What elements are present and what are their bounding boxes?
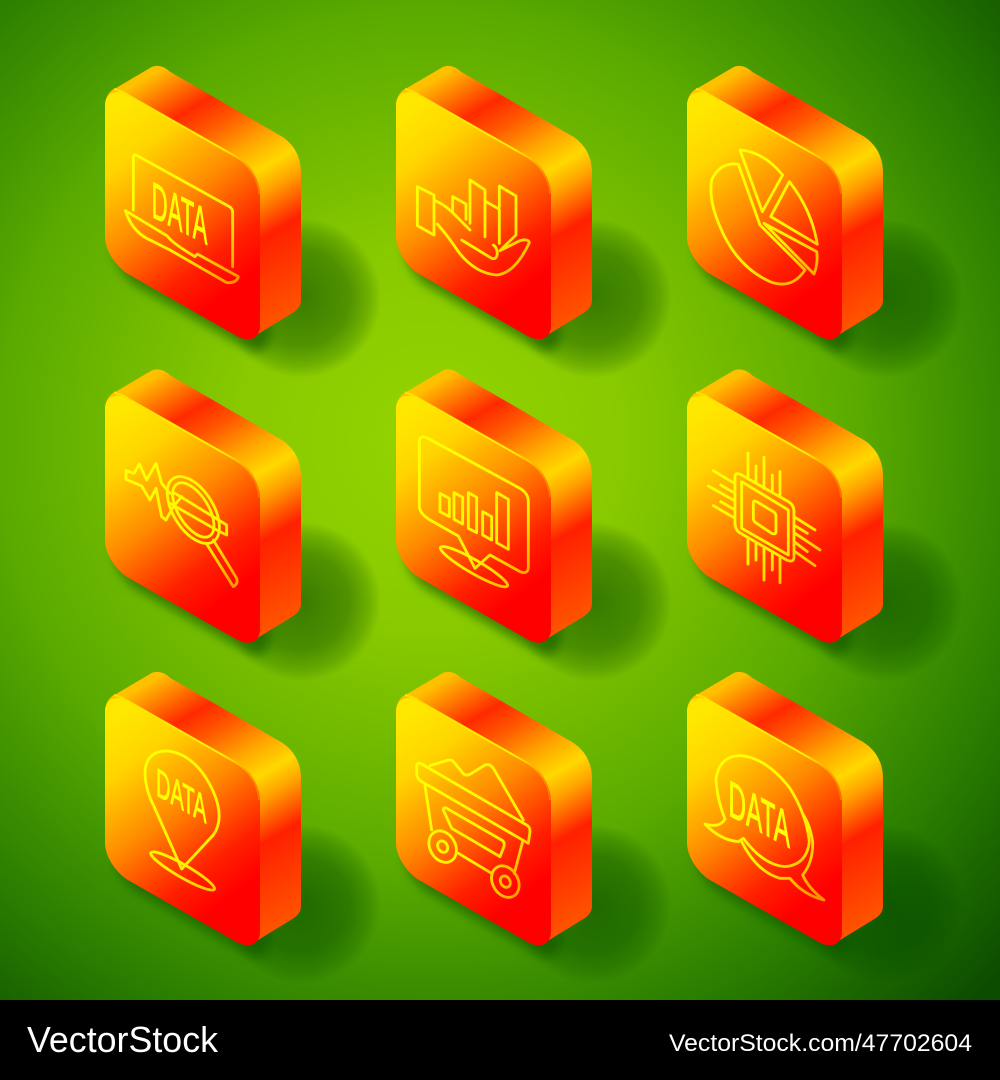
tile: chat bars (396, 369, 672, 682)
tile: mine cart (396, 672, 672, 984)
brand name: VectorStock (27, 1019, 219, 1060)
tile block (105, 369, 381, 682)
tile block (396, 66, 672, 378)
tile: hand with bars (396, 66, 672, 378)
tile: location pin (105, 672, 381, 984)
tile: pie chart (687, 66, 963, 378)
icon: magnifier over waveform (126, 463, 237, 587)
tile: speech bubbles (687, 672, 963, 984)
tile block (687, 66, 963, 378)
icon: data speech bubbles: DATA (728, 769, 790, 860)
icon: bubble with bar chart (419, 437, 528, 592)
tile block (396, 672, 672, 984)
icon: data location pin: DATA (156, 760, 207, 832)
icon: pie chart (711, 150, 817, 284)
tile block (105, 66, 381, 378)
tile: chip (687, 369, 963, 682)
icon: mining cart (417, 760, 530, 902)
icon: data speech bubbles (705, 756, 824, 900)
tile block (687, 369, 963, 682)
icon: laptop (125, 155, 238, 283)
tile: magnifier (105, 369, 381, 682)
image id: VectorStock.com/47702604 (669, 1030, 972, 1057)
tile block (105, 672, 381, 984)
icon: data location pin (145, 751, 219, 895)
icon: processor chip (708, 453, 820, 583)
tile block (687, 672, 963, 984)
icon: laptop: DATA (152, 172, 208, 256)
tile block (396, 369, 672, 682)
footer bar (0, 1000, 1000, 1080)
tile: laptop data (105, 66, 381, 378)
icon: hand with bar chart (417, 180, 529, 275)
